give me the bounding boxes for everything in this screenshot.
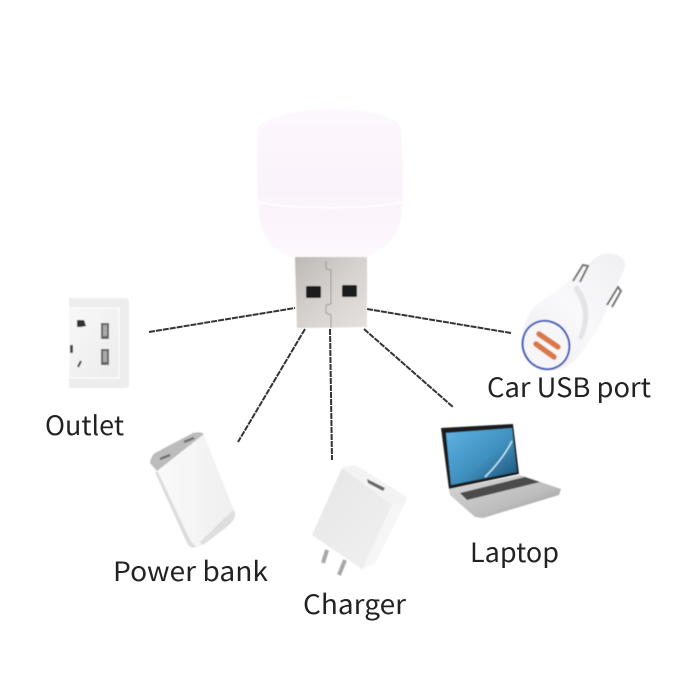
icon: laptop — [441, 424, 561, 518]
USB hole left — [306, 286, 321, 298]
icon: wall charger — [312, 465, 407, 575]
icon: wall outlet — [69, 298, 129, 388]
car charger prongs — [573, 265, 588, 282]
lamp lower dome — [259, 203, 402, 259]
dashed connector lines — [149, 308, 511, 460]
car charger body — [522, 254, 625, 371]
USB plug — [295, 257, 367, 328]
line to power bank — [238, 329, 305, 442]
lamp upper shade — [257, 109, 403, 207]
line to charger — [330, 329, 332, 460]
label: Charger: Charger — [303, 583, 407, 622]
line to outlet — [149, 308, 295, 332]
laptop lid — [441, 424, 519, 489]
laptop base — [449, 475, 561, 518]
laptop screen — [446, 428, 517, 485]
car charger ports — [539, 334, 558, 347]
icon: USB lamp — [257, 109, 403, 328]
car charger face ring — [514, 312, 578, 378]
label: Laptop: Laptop — [470, 531, 559, 570]
line to laptop — [364, 329, 453, 407]
label: Car USB port: Car USB port — [487, 366, 651, 405]
icon: car USB charger — [514, 254, 625, 378]
line to car USB port — [367, 309, 511, 333]
label: Outlet: Outlet — [45, 404, 124, 443]
icon: power bank — [150, 432, 235, 548]
laptop keyboard — [460, 477, 540, 500]
USB hole right — [342, 285, 357, 297]
label: Power bank: Power bank — [113, 550, 268, 589]
